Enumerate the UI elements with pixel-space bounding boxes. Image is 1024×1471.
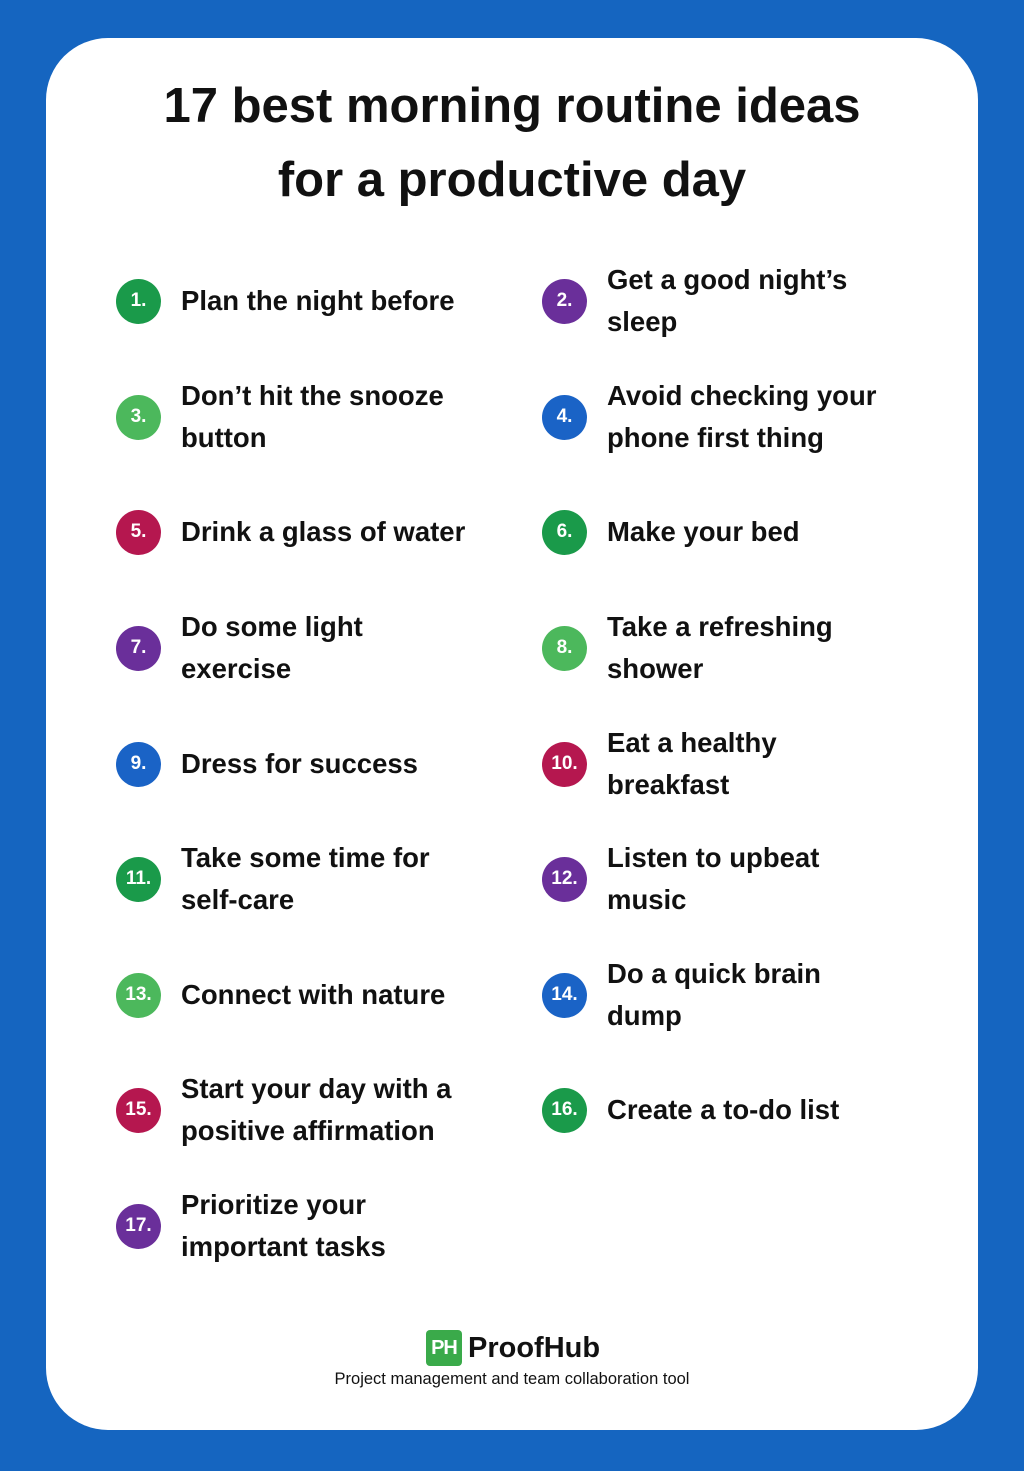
- item 6: Make your bed: [607, 516, 800, 547]
- item 5: 5.: [131, 521, 146, 542]
- item 11: 11.: [126, 868, 151, 889]
- item 12: 12.: [551, 868, 578, 889]
- item 7: [116, 611, 363, 684]
- item 9: [116, 742, 418, 787]
- item 7: Do some light: [181, 611, 363, 642]
- item 9: 9.: [131, 753, 146, 774]
- item 8: shower: [607, 653, 703, 684]
- item 16: Create a to-do list: [607, 1094, 839, 1125]
- item 5: [116, 510, 465, 555]
- item 1: Plan the night before: [181, 285, 454, 316]
- item 4: [542, 380, 876, 453]
- item 1: 1.: [131, 290, 146, 311]
- item 14: 14.: [551, 984, 578, 1005]
- item 7: exercise: [181, 653, 291, 684]
- item 17: important tasks: [181, 1231, 386, 1262]
- item 2: [542, 264, 847, 337]
- logo: [426, 1330, 600, 1366]
- item 14: dump: [607, 1000, 682, 1031]
- item 10: [542, 727, 777, 800]
- item 3: Don’t hit the snooze: [181, 380, 444, 411]
- item 14: Do a quick brain: [607, 958, 821, 989]
- item 8: 8.: [557, 637, 572, 658]
- item 17: Prioritize your: [181, 1189, 366, 1220]
- item 2: 2.: [557, 290, 572, 311]
- item 11: self-care: [181, 884, 294, 915]
- item 16: 16.: [551, 1099, 578, 1120]
- item 10: breakfast: [607, 769, 729, 800]
- tagline: Project management and team collaboration tool: [335, 1370, 689, 1388]
- icon: PH: [426, 1330, 462, 1366]
- item 3: button: [181, 422, 267, 453]
- item 2: sleep: [607, 306, 677, 337]
- item 15: [116, 1073, 452, 1146]
- title: [163, 79, 861, 207]
- item 13: Connect with nature: [181, 979, 445, 1010]
- item 13: [116, 973, 445, 1018]
- logo: ProofHub: [468, 1332, 600, 1364]
- item 6: 6.: [557, 521, 572, 542]
- item 8: Take a refreshing: [607, 611, 833, 642]
- item 17: 17.: [125, 1215, 152, 1236]
- item 17: [116, 1189, 386, 1262]
- item 3: 3.: [131, 406, 146, 427]
- item 16: [542, 1088, 839, 1133]
- item 15: 15.: [125, 1099, 152, 1120]
- item 2: Get a good night’s: [607, 264, 847, 295]
- item 15: Start your day with a: [181, 1073, 451, 1104]
- item 4: 4.: [557, 406, 572, 427]
- item 7: 7.: [131, 637, 146, 658]
- item 8: [542, 611, 833, 684]
- item 6: [542, 510, 800, 555]
- item 13: 13.: [125, 984, 152, 1005]
- item 12: music: [607, 884, 686, 915]
- item 11: Take some time for: [181, 842, 430, 873]
- item 5: Drink a glass of water: [181, 516, 465, 547]
- item 15: positive affirmation: [181, 1115, 435, 1146]
- item 10: 10.: [551, 753, 578, 774]
- item 12: Listen to upbeat: [607, 842, 819, 873]
- item 4: phone first thing: [607, 422, 824, 453]
- title: for a productive day: [278, 153, 746, 207]
- title: 17 best morning routine ideas: [163, 79, 861, 133]
- item 9: Dress for success: [181, 748, 418, 779]
- item 11: [116, 842, 430, 915]
- item 12: [542, 842, 820, 915]
- item 14: [542, 958, 821, 1031]
- item 4: Avoid checking your: [607, 380, 876, 411]
- item 10: Eat a healthy: [607, 727, 777, 758]
- item 1: [116, 279, 454, 324]
- item 3: [116, 380, 444, 453]
- icon: PH: PH: [431, 1336, 457, 1358]
